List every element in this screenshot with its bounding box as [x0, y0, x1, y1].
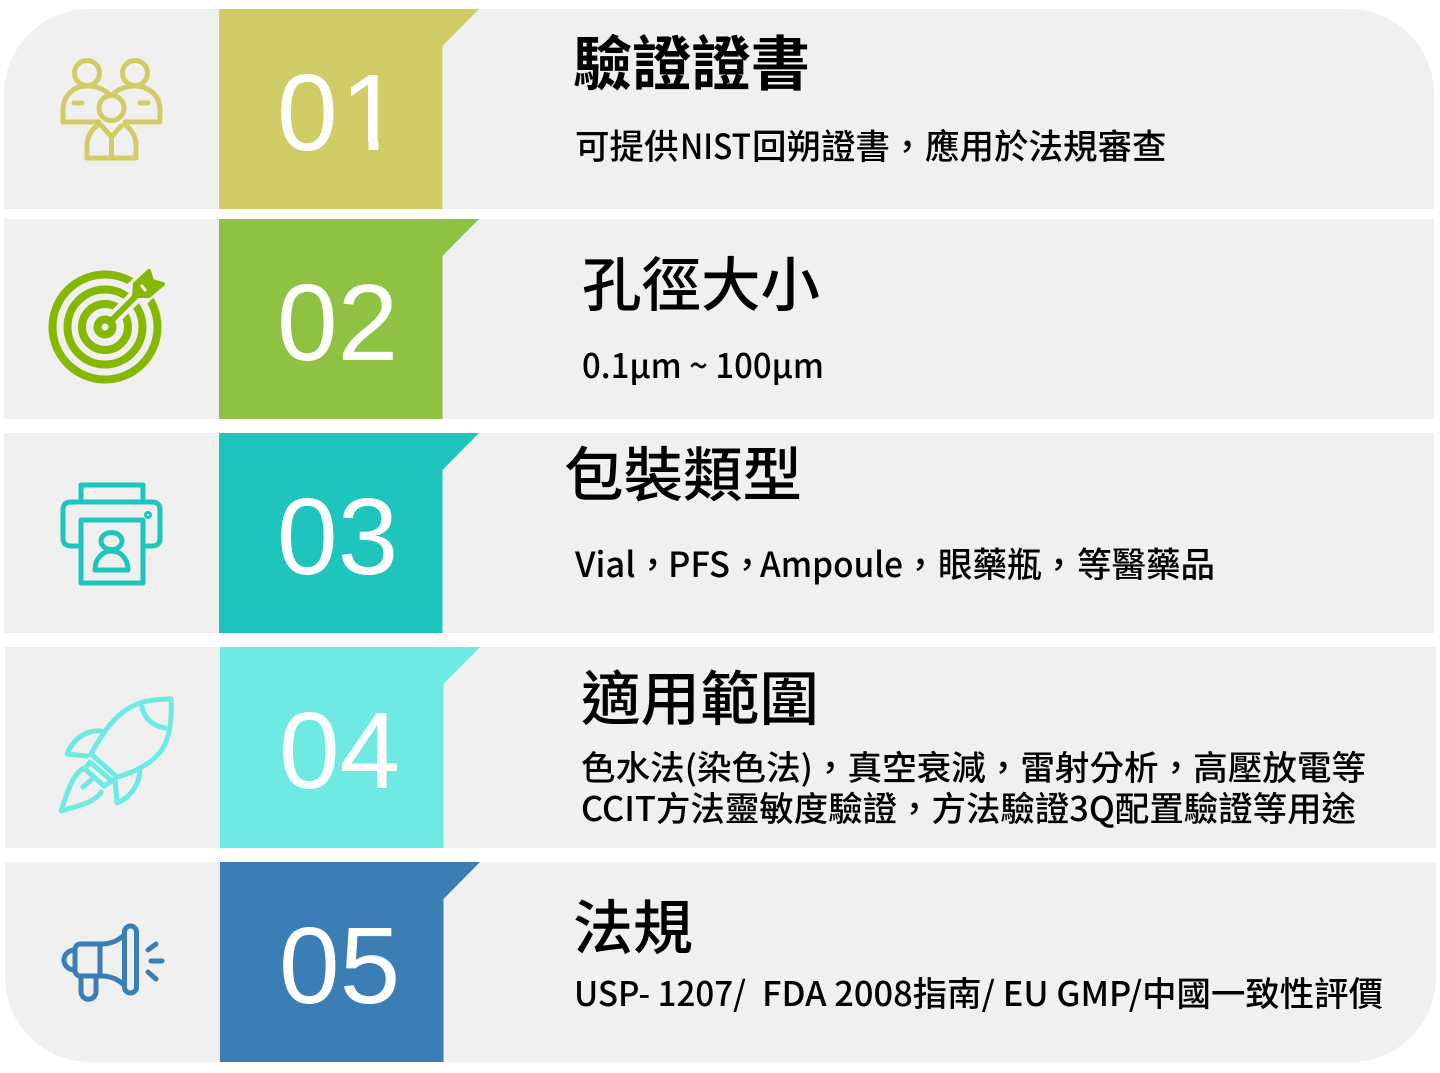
number ribbon [220, 647, 480, 848]
number: 02 [277, 262, 398, 384]
description: ， [903, 537, 938, 587]
panel: 02 pore size [4, 219, 1434, 419]
heading: 法規 [573, 881, 693, 966]
description: USP- 1207/ [574, 967, 746, 1016]
number: 05 [279, 905, 400, 1027]
description: 0.1µm ~ 100µm [582, 339, 824, 388]
icon: people [63, 60, 160, 158]
row background [5, 647, 1436, 848]
panel: 03 packaging [4, 428, 1434, 633]
number ribbon [219, 433, 479, 633]
panel: 05 regulation [5, 862, 1436, 1062]
description: 回朔證書， [752, 119, 924, 169]
heading: 孔徑大小 [582, 238, 820, 323]
description line 1: 色水法(染色法)，真空衰減，雷射分析，高壓放電等 [581, 741, 1366, 790]
description: 等醫藥品 [1077, 537, 1215, 587]
icon: target [52, 271, 163, 380]
number ribbon [219, 9, 479, 209]
number ribbon [220, 862, 480, 1062]
description line 2: CCIT方法靈敏度驗證，方法驗證3Q配置驗證等用途 [581, 782, 1356, 831]
icon: printer [63, 485, 160, 583]
heading: 適用範圍 [581, 652, 819, 737]
panel: 04 scope [5, 647, 1436, 848]
description: NIST [680, 119, 751, 169]
row background [4, 219, 1434, 419]
number ribbon [219, 219, 479, 419]
description: Vial， [574, 537, 670, 587]
number: 03 [277, 476, 398, 598]
icon: megaphone [64, 926, 162, 999]
description: 可提供 [575, 119, 678, 169]
description: Ampoule [760, 537, 903, 587]
description: 眼藥瓶， [938, 537, 1076, 587]
icon: rocket [61, 699, 171, 811]
panel: 01 certificate [4, 9, 1434, 209]
description: PFS， [668, 537, 764, 587]
number: 04 [279, 690, 400, 812]
description: FDA 2008指南/ EU GMP/中國一致性評價 [762, 967, 1383, 1016]
row background [4, 433, 1434, 633]
description: 應用於法規審查 [925, 119, 1166, 169]
heading: 驗證證書 [573, 17, 810, 102]
heading: 包裝類型 [564, 428, 802, 513]
row background [5, 862, 1436, 1062]
number: 01 [277, 52, 401, 174]
row background [4, 9, 1434, 209]
